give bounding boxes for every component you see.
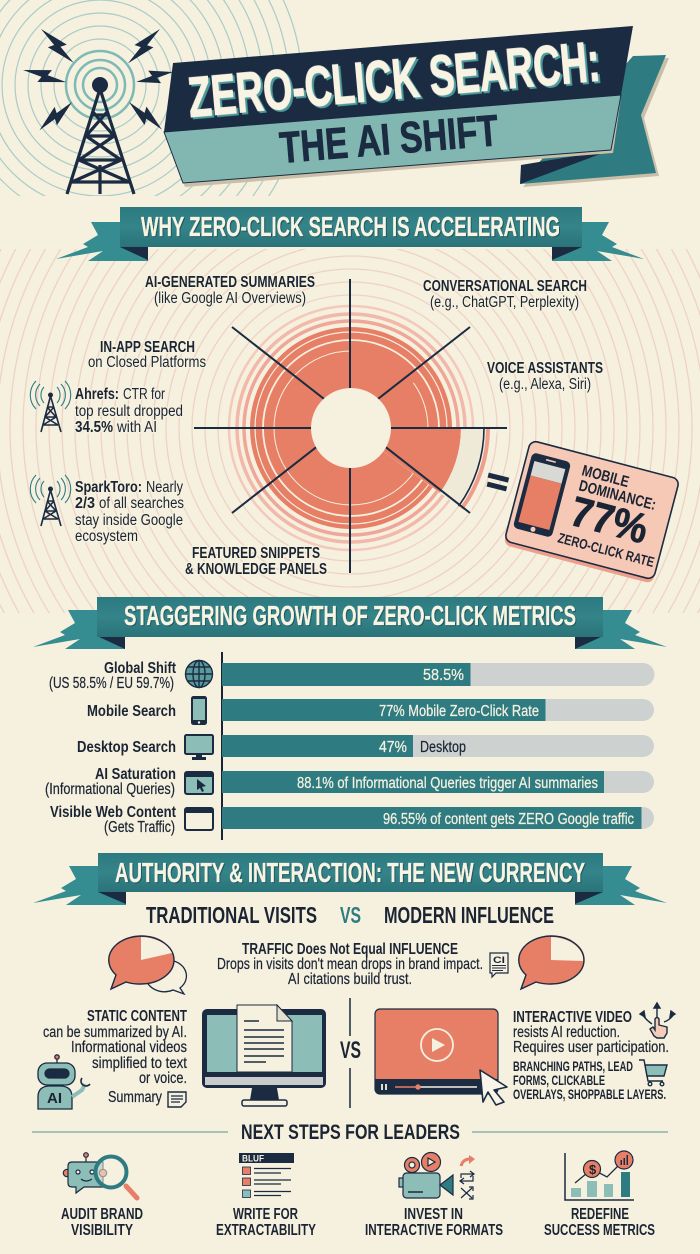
icon: browser with cursor	[185, 772, 213, 794]
text: static content: Summary	[108, 1089, 162, 1106]
stat: SparkToro: ecosystem	[75, 528, 138, 545]
text: static content: Informational videos	[71, 1039, 187, 1056]
radial chart	[194, 279, 507, 573]
stat: Ahrefs: top result dropped	[75, 403, 183, 420]
bar: desktop search	[222, 735, 654, 757]
section banner: why accelerating	[56, 207, 644, 261]
label: featured snippets	[185, 545, 327, 578]
icon: AI robot	[38, 1055, 90, 1109]
stat: SparkToro	[75, 479, 184, 545]
callout: mobile dominance card	[503, 440, 680, 584]
icon: AI robot: AI	[47, 1090, 62, 1107]
text: interactive video: Requires user participation.	[513, 1039, 669, 1056]
icon: BLUF document	[239, 1153, 294, 1198]
text: traffic does not equal influence: Drops in visits don't mean drops in brand impact.	[217, 956, 483, 973]
background rings: accelerating section	[0, 249, 700, 613]
text: static content	[43, 1008, 188, 1106]
stat: Ahrefs	[75, 386, 183, 436]
icon: BLUF document: BLUF	[242, 1154, 264, 1164]
text: traffic does not equal influence	[217, 941, 483, 988]
icon: growth chart: $	[589, 1162, 597, 1177]
text: write for extractability: EXTRACTABILITY	[216, 1222, 316, 1239]
label: AI-generated summaries	[145, 274, 315, 307]
card text	[556, 462, 658, 570]
bar labels	[45, 660, 177, 836]
text: static content: can be summarized by AI.	[43, 1024, 187, 1041]
label: conversational search	[423, 278, 587, 311]
icon: phone	[513, 452, 571, 538]
icon: small tower, Ahrefs	[30, 381, 71, 432]
text: write for extractability	[216, 1206, 316, 1239]
text: traffic does not equal influence: AI citations build trust.	[288, 971, 412, 988]
background rings: header	[0, 0, 300, 196]
comparison heading: VS	[340, 902, 361, 928]
title line 2: THE AI SHIFT	[278, 106, 500, 173]
bar: global shift: 58.5%	[423, 667, 464, 684]
label: conversational search: (e.g., ChatGPT, Perplexity)	[430, 294, 579, 311]
comparison heading: MODERN INFLUENCE	[384, 902, 554, 928]
bar: desktop search: Desktop	[420, 739, 466, 756]
text: redefine success metrics: REDEFINE	[571, 1206, 629, 1223]
stat: Ahrefs: CTR for	[123, 386, 165, 403]
icon: globe	[186, 660, 212, 688]
bar: mobile search: 77% Mobile Zero-Click Rate	[379, 703, 539, 720]
bar labels: (Informational Queries)	[45, 781, 175, 798]
text: interactive video: INTERACTIVE VIDEO	[513, 1009, 632, 1026]
label: featured snippets: & KNOWLEDGE PANELS	[185, 561, 327, 578]
stat: SparkToro: 2/3	[75, 495, 95, 512]
icon: summary document	[168, 1092, 186, 1107]
card text: ZERO-CLICK RATE	[556, 529, 656, 570]
icon: radio tower with signal bolts	[21, 24, 175, 194]
label: voice assistants	[487, 360, 603, 393]
bar labels: (US 58.5% / EU 59.7%)	[49, 675, 174, 692]
text: interactive video: FORMS, CLICKABLE	[513, 1073, 605, 1088]
text: interactive video: BRANCHING PATHS, LEAD	[513, 1059, 633, 1074]
bar labels: Desktop Search	[77, 739, 176, 756]
stat: SparkToro: SparkToro:	[75, 479, 142, 496]
label: AI-generated summaries: (like Google AI Overviews)	[154, 290, 306, 307]
icon: video player	[375, 1009, 507, 1105]
stat: Ahrefs: with AI	[116, 419, 157, 436]
icon: growth chart	[565, 1151, 634, 1200]
bar: desktop search: 47%	[379, 739, 407, 756]
bar chart: zero-click metrics	[222, 652, 654, 840]
text: invest in interactive formats	[365, 1206, 503, 1239]
label: in-app search: IN-APP SEARCH	[100, 339, 195, 356]
label: voice assistants: (e.g., Alexa, Siri)	[499, 376, 591, 393]
heading: next steps: NEXT STEPS FOR LEADERS	[241, 1120, 460, 1144]
text: static content: simplified to text	[92, 1055, 188, 1072]
document	[237, 1005, 292, 1072]
interaction arrows	[460, 1155, 475, 1199]
text: interactive video: resists AI reduction.	[513, 1024, 620, 1041]
label: in-app search: on Closed Platforms	[88, 354, 206, 371]
label: AI-generated summaries: AI-GENERATED SUMMARIES	[145, 274, 315, 291]
icon: browser window	[185, 808, 213, 830]
comparison heading	[146, 902, 554, 928]
text: write for extractability: WRITE FOR	[233, 1206, 298, 1223]
bar: AI saturation: 88.1% of Informational Queries trigger AI summaries	[297, 775, 598, 792]
bar: mobile search	[222, 699, 654, 721]
comparison heading: TRADITIONAL VISITS	[146, 902, 317, 928]
label: conversational search: CONVERSATIONAL SEARCH	[423, 278, 587, 295]
label: voice assistants: VOICE ASSISTANTS	[487, 360, 603, 377]
label: featured snippets: FEATURED SNIPPETS	[192, 545, 320, 562]
icon: audit, robot and magnifier	[63, 1153, 137, 1198]
bar: AI saturation	[222, 771, 654, 793]
icon: speech bubble with pie, right	[519, 936, 584, 989]
bar labels: Mobile Search	[87, 703, 176, 720]
stat: Ahrefs: Ahrefs:	[75, 386, 119, 403]
text: audit brand visibility: AUDIT BRAND	[61, 1206, 143, 1223]
text: invest in interactive formats: INVEST IN	[404, 1206, 463, 1223]
text: static content: or voice.	[139, 1070, 187, 1087]
bar: visible web content	[222, 807, 654, 829]
bar labels: (Gets Traffic)	[104, 819, 175, 836]
text: interactive video	[513, 1009, 669, 1102]
section banner: staggering growth	[33, 597, 667, 649]
text: traffic does not equal influence: TRAFFIC Does Not Equal INFLUENCE	[242, 941, 458, 958]
icon: mobile	[191, 696, 207, 725]
stat: SparkToro: stay inside Google	[75, 512, 183, 529]
bar labels: Visible Web Content	[50, 804, 177, 821]
card text: 77%	[566, 487, 653, 552]
icon: small tower, SparkToro	[30, 475, 71, 526]
stat: SparkToro: Nearly	[146, 479, 183, 496]
title banner	[164, 26, 669, 187]
text: redefine success metrics: SUCCESS METRICS	[544, 1222, 655, 1239]
label: in-app search	[88, 339, 206, 371]
equals sign	[487, 473, 509, 491]
text: audit brand visibility	[61, 1206, 143, 1239]
text: audit brand visibility: VISIBILITY	[71, 1222, 133, 1239]
icon: citation document	[490, 953, 508, 977]
icon: shopping cart	[639, 1060, 667, 1086]
versus divider	[340, 998, 361, 1108]
section banner: authority and interaction	[33, 853, 667, 905]
icon: desktop	[185, 735, 213, 760]
bar labels: Global Shift	[104, 660, 177, 677]
card text: DOMINANCE:	[577, 477, 658, 514]
stat: SparkToro: of all searches	[99, 495, 184, 512]
versus divider: VS	[340, 1037, 361, 1064]
icon: monitor with document	[202, 1005, 326, 1106]
icon: speech bubbles with pie, left	[109, 936, 186, 994]
banner tail	[520, 55, 669, 187]
icon: citation document: CI	[493, 955, 505, 965]
text: invest in interactive formats: INTERACTIVE FORMATS	[365, 1222, 503, 1239]
text: redefine success metrics	[544, 1206, 655, 1239]
card text: MOBILE	[580, 462, 631, 491]
bar labels: AI Saturation	[95, 766, 176, 783]
text: static content: STATIC CONTENT	[87, 1008, 187, 1025]
bar: visible web content: 96.55% of content gets ZERO Google traffic	[383, 811, 634, 828]
icon: touch hand with arrows	[640, 1003, 675, 1038]
icon: video camera	[399, 1152, 475, 1199]
cursor	[480, 1070, 507, 1105]
highlighted 77% wedge	[351, 428, 498, 515]
bar: global shift	[222, 663, 654, 686]
stat: Ahrefs: 34.5%	[75, 419, 113, 436]
